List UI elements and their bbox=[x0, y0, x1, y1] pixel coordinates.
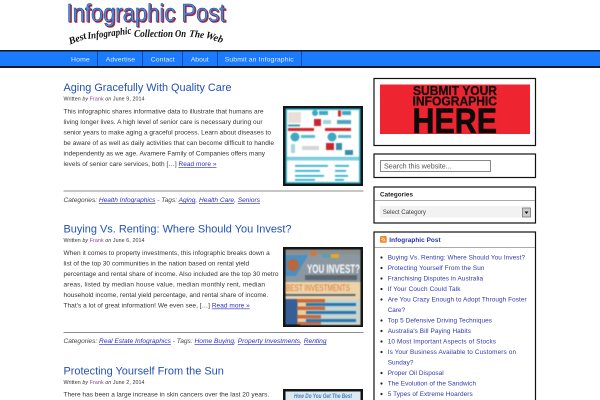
post 2 thumbnail: you invest infographic: BEST INVESTMENTS bbox=[286, 283, 350, 293]
rss post list: The Evolution of the Sandwich bbox=[388, 381, 476, 388]
rss post list: Proper Oil Disposal bbox=[388, 370, 444, 377]
rss post list: Protecting Yourself From the Sun bbox=[388, 265, 485, 272]
site logo: Infographic Post bbox=[66, 0, 226, 28]
post 2 excerpt: list of the top 30 communities in the nation based on rental yield bbox=[64, 260, 249, 268]
post 2 thumbnail: you invest infographic: YOU INVEST? bbox=[307, 262, 360, 276]
post 1 excerpt: independently as we age. Avamere Family of Companies offers many bbox=[64, 150, 266, 158]
tagline: Best bbox=[66, 30, 89, 48]
rss post list: Australia's Bill Paying Habits bbox=[388, 328, 471, 335]
rss post list: If Your Couch Could Talk bbox=[388, 286, 461, 293]
tagline: The bbox=[189, 29, 205, 41]
banner: submit your infographic here: SUBMIT YOUR bbox=[413, 84, 497, 98]
post 2 thumbnail: you invest infographic bbox=[283, 247, 363, 327]
site logo: Infographic Post bbox=[68, 0, 227, 28]
search input: Search this website... bbox=[384, 162, 452, 170]
post 1 excerpt: senior years to make aging a graceful process. Learn about diseases to bbox=[64, 130, 271, 136]
category dropdown: Select Category bbox=[383, 209, 427, 216]
post 1 excerpt: living longer lives. A high level of senior care is necessary during our bbox=[64, 119, 263, 126]
sidebar: search widget bbox=[374, 154, 536, 178]
banner: submit your infographic here: HERE bbox=[412, 102, 497, 141]
post 3 thumbnail: sun protection infographic bbox=[283, 389, 363, 400]
post 2 categories and tags: Categories: Real Estate Infographics - Tags: Home Buying, Property Investments, Renting bbox=[64, 338, 327, 345]
tagline: Web bbox=[204, 30, 225, 46]
post 2 excerpt: household income, rental yield percentage, and rental share of income. bbox=[64, 292, 268, 299]
rss post list: Care? bbox=[388, 307, 405, 314]
post 1 categories and tags: Categories: Health Infographics - Tags: Aging, Health Care, Seniors bbox=[64, 197, 261, 204]
rss post list: Top 5 Defensive Driving Techniques bbox=[388, 318, 492, 325]
post 1: aging gracefully bbox=[64, 82, 363, 204]
sidebar: categories widget bbox=[374, 187, 536, 223]
post 2 byline: Written by Frank on June 6, 2014 bbox=[64, 238, 145, 244]
rss post list: Are You Crazy Enough to Adopt Through Foster bbox=[388, 297, 528, 304]
search input bbox=[380, 160, 490, 172]
rss post list: Sunday? bbox=[388, 360, 414, 367]
post 3 byline: Written by Frank on June 2, 2014 bbox=[64, 380, 145, 386]
rss icon bbox=[380, 236, 387, 243]
navigation bar bbox=[0, 50, 600, 68]
sidebar: submit banner widget bbox=[374, 78, 536, 146]
post 1 excerpt: levels of senior care services, both […] Read more » bbox=[64, 161, 217, 168]
banner: submit your infographic here bbox=[380, 84, 530, 141]
sidebar: rss feed widget bbox=[374, 232, 536, 400]
navigation bar: Home bbox=[71, 56, 90, 64]
post 2 excerpt: areas, listed by median house value, median monthly rent, median bbox=[64, 282, 265, 288]
post 1 excerpt: This infographic shares informative data to illustrate that humans are bbox=[64, 108, 264, 116]
navigation bar: Contact bbox=[151, 56, 175, 64]
post 2 excerpt: When it comes to property investments, this infographic breaks down a bbox=[64, 250, 270, 257]
post 3 excerpt: There has been a large increase in skin cancers over the last 20 years. bbox=[64, 392, 269, 398]
tagline bbox=[66, 26, 225, 48]
post 1 excerpt: be aware of as well as daily activities that can become difficult to handle bbox=[64, 140, 274, 147]
rss post list: Franchising Disputes in Australia bbox=[388, 276, 483, 283]
tagline: Collection bbox=[134, 29, 173, 40]
post 2 excerpt bbox=[64, 250, 279, 310]
rss post list: 10 Most Important Aspects of Stocks bbox=[388, 339, 496, 346]
post 2 title: Buying Vs. Renting: Where Should You Invest? bbox=[64, 224, 292, 236]
post 3 title: Protecting Yourself From the Sun bbox=[64, 366, 224, 378]
rss heading: Infographic Post bbox=[389, 237, 441, 244]
navigation bar: Advertise bbox=[106, 56, 135, 64]
navigation bar: About bbox=[191, 56, 209, 64]
categories heading: Categories bbox=[380, 192, 413, 198]
post 1 thumbnail: senior care infographic bbox=[283, 106, 363, 186]
post 2 excerpt: percentage and rental share of income. Also included are the top 30 metro bbox=[64, 271, 279, 278]
rss post list bbox=[380, 255, 528, 398]
post 3: protecting yourself from the sun bbox=[64, 366, 363, 400]
post 2: buying vs renting bbox=[64, 224, 363, 345]
post 1 title: Aging Gracefully With Quality Care bbox=[64, 82, 232, 94]
navigation bar: Submit an Infographic bbox=[225, 56, 294, 64]
post 3 thumbnail: sun protection infographic: How Do You Get The Best bbox=[294, 394, 353, 400]
category dropdown bbox=[380, 206, 531, 218]
rss post list: Is Your Business Available to Customers on bbox=[388, 349, 516, 356]
post 1 byline: Written by Frank on June 9, 2014 bbox=[64, 96, 145, 102]
banner: submit your infographic here: INFOGRAPHIC bbox=[412, 94, 497, 108]
rss post list: Buying Vs. Renting: Where Should You Invest? bbox=[388, 255, 525, 262]
tagline: On bbox=[175, 29, 186, 40]
tagline: Infographic bbox=[86, 26, 133, 42]
rss post list: 5 Types of Extreme Hoarders bbox=[388, 391, 473, 398]
post 1 excerpt bbox=[64, 108, 274, 168]
post 2 excerpt: That's a lot of great information! We even see, […] Read more » bbox=[64, 302, 250, 310]
